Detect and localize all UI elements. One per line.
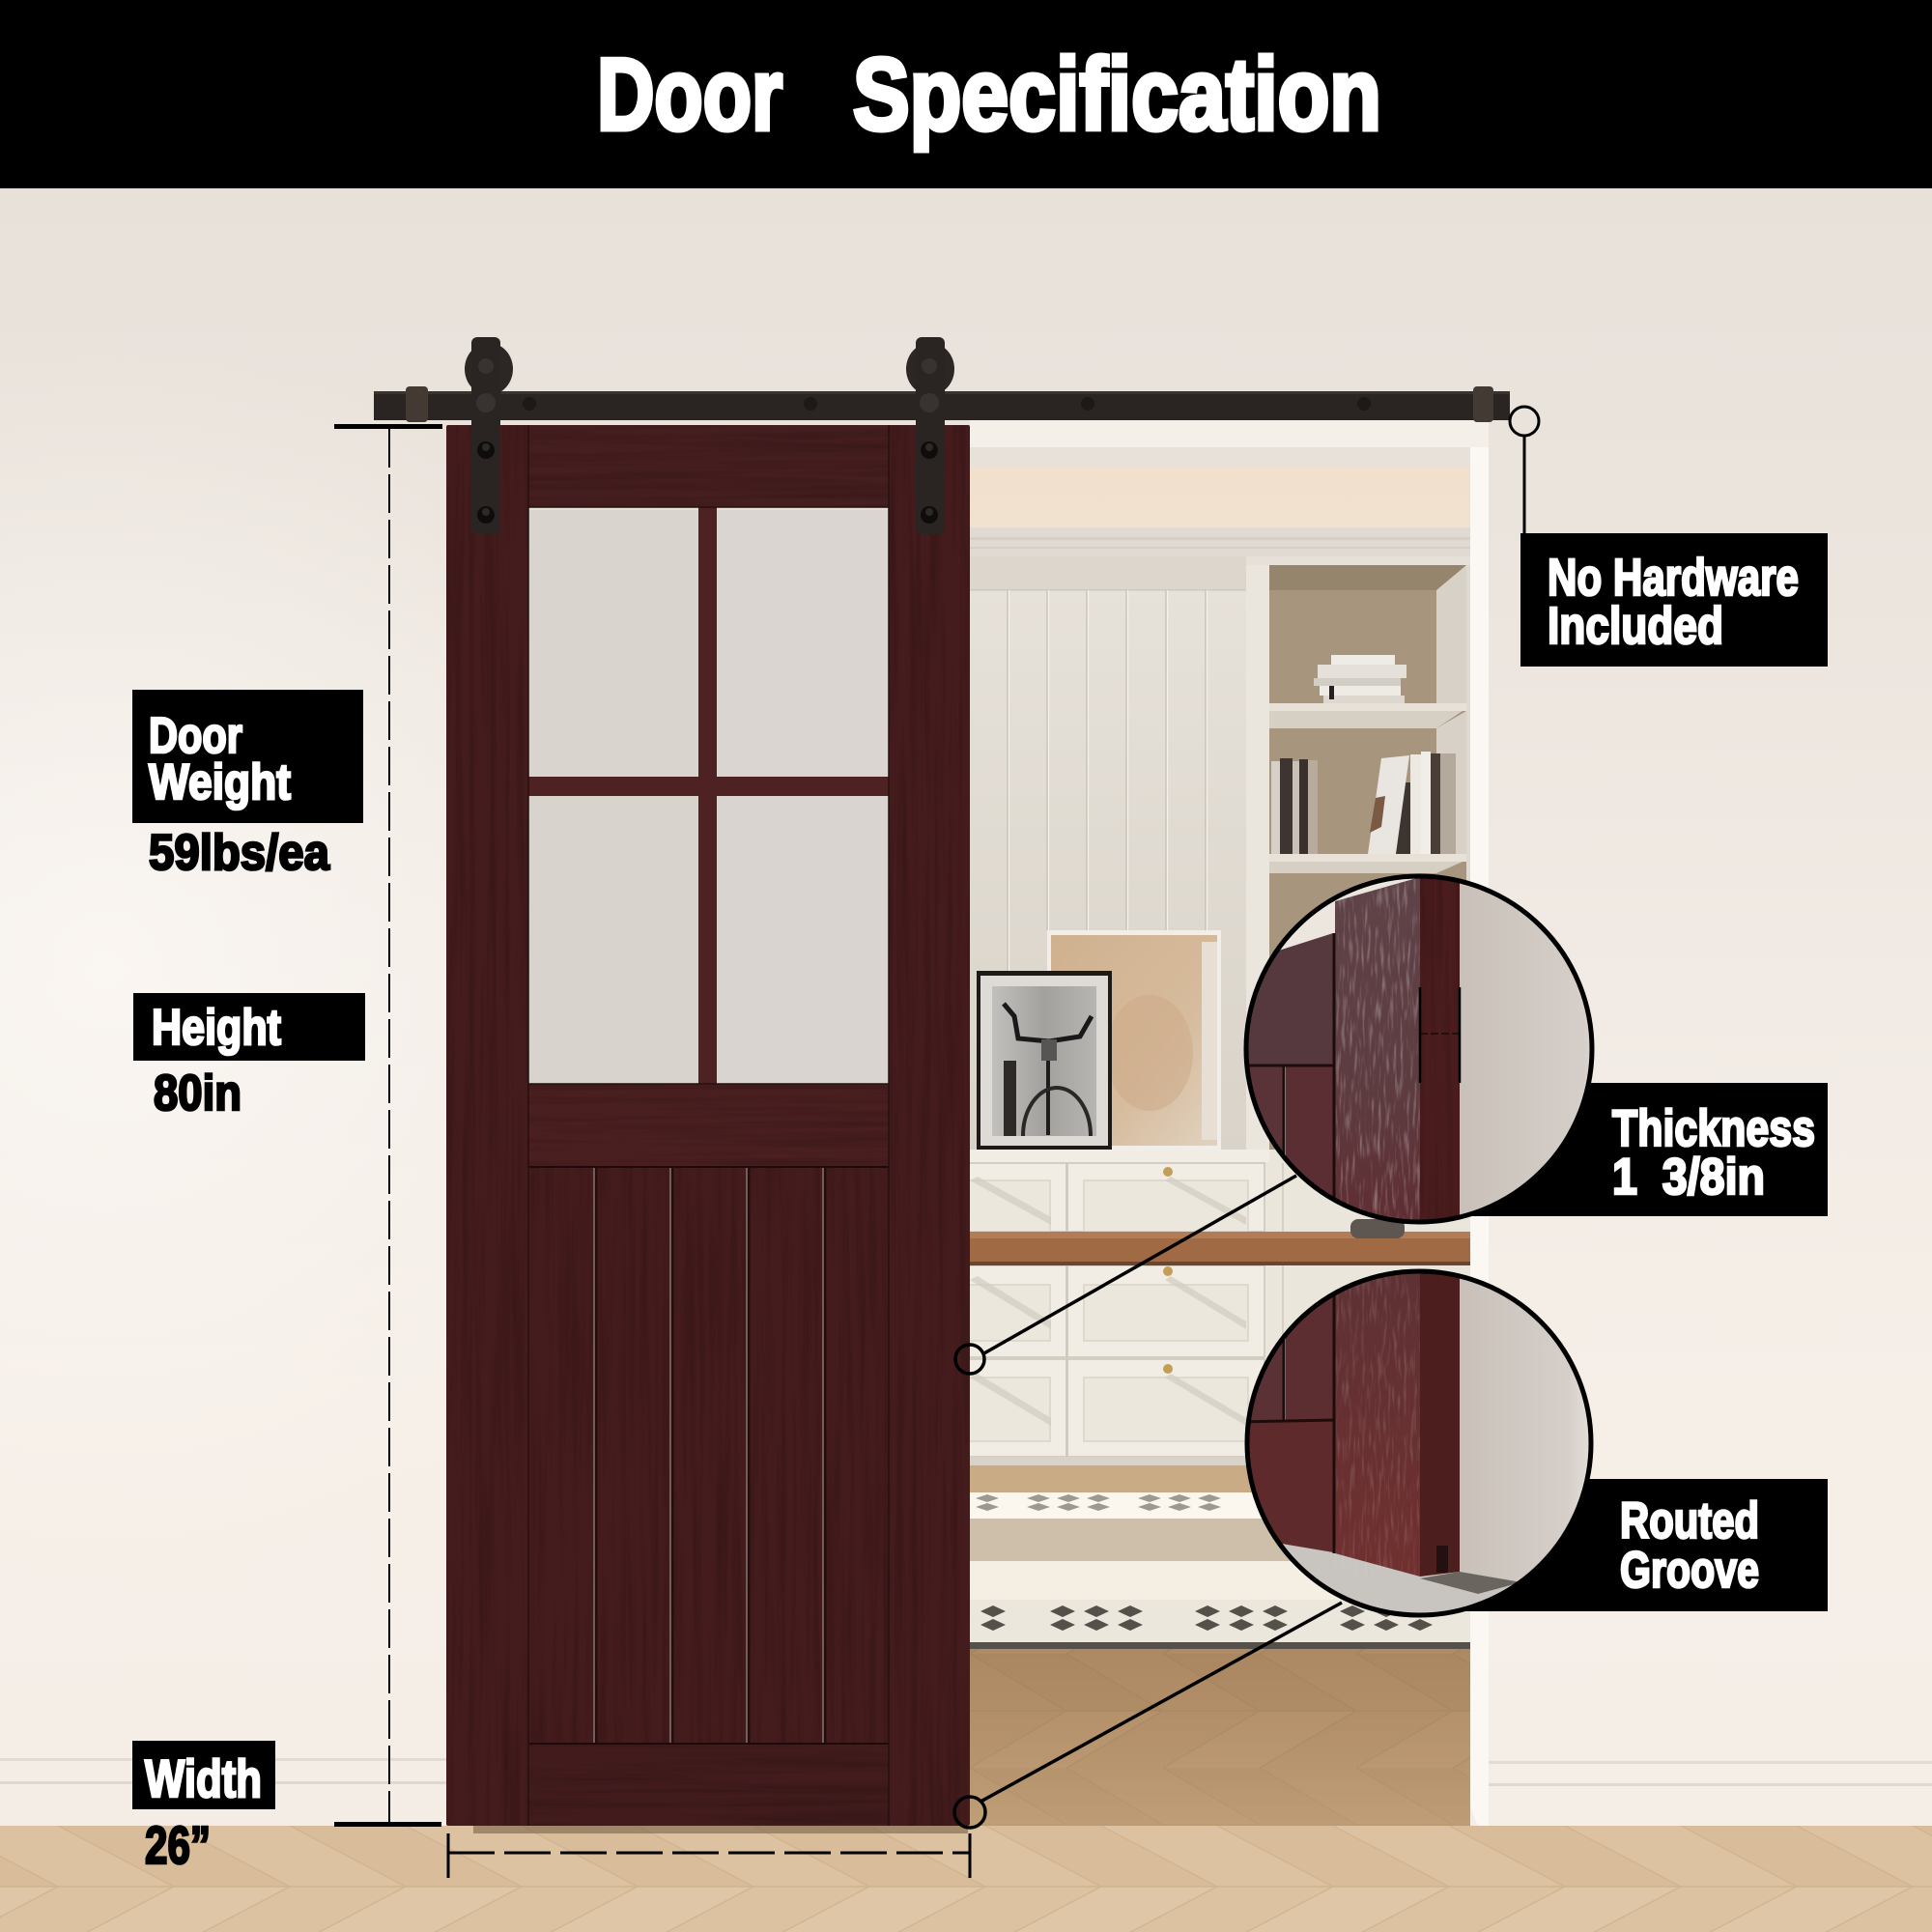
callout: routed groove label box: Groove [1620,1542,1759,1599]
ceiling glow [970,467,1470,527]
tan art print [1047,930,1221,1150]
patterned rug [970,1492,1470,1649]
callout: door weight [132,690,363,881]
doorway frame [970,419,1489,1826]
right hanger strap [906,337,954,534]
bookcase [1246,565,1470,1174]
sliding track rail [374,386,1510,422]
height dimension line [334,424,442,1827]
leader line: thickness [955,1176,1296,1374]
callout: thickness label box: 1 3/8in [1612,1149,1765,1206]
callout: no hardware included: No Hardware [1548,549,1799,607]
glass panes [528,507,889,1084]
glass muntins [528,507,889,1084]
callout: thickness label box: Thickness [1612,1100,1815,1157]
callout: height: Height [152,1000,281,1056]
title: Door [597,38,782,152]
callout: routed groove label box: Routed [1620,1492,1759,1549]
drawers and cabinetry [966,1150,1470,1465]
callout: width [132,1741,275,1875]
upright books [1271,752,1456,854]
left hanger strap [465,337,513,534]
callout: height: 80in [154,1065,242,1122]
framed bicycle photo [977,971,1112,1150]
width dimension line [448,1833,970,1878]
lower plank panel [528,1167,889,1744]
magnified circle: door thickness [1244,873,1594,1225]
callout: routed groove label box [1417,1479,1828,1611]
herringbone floor in room [970,1649,1470,1826]
callout: height [133,993,365,1122]
callout: thickness label box [1417,1083,1828,1216]
interior room seen through the doorway [966,419,1489,1826]
callout: width: 26” [145,1815,211,1875]
leader line: routed groove [954,1603,1342,1828]
door stiles and rails [446,425,970,1826]
barn door [446,425,970,1826]
callout: door weight: Door [149,708,242,764]
callout: door weight: 59lbs/ea [149,825,330,881]
track stoppers [406,386,1493,422]
callout: width: Width [145,1748,262,1808]
title: Specification [853,38,1381,152]
callout: door weight: Weight [149,754,291,810]
stack of books [1314,655,1406,703]
callout: no hardware included: Included [1548,597,1723,655]
wainscot panelling [970,556,1246,1150]
magnified circle: routed groove [1236,1256,1604,1616]
hallway floor [970,1465,1470,1492]
callout: no hardware included [1510,407,1828,667]
header banner [0,0,1932,188]
crown moulding [970,527,1470,556]
door shadow on floor [473,1826,968,1833]
title [597,38,1381,152]
